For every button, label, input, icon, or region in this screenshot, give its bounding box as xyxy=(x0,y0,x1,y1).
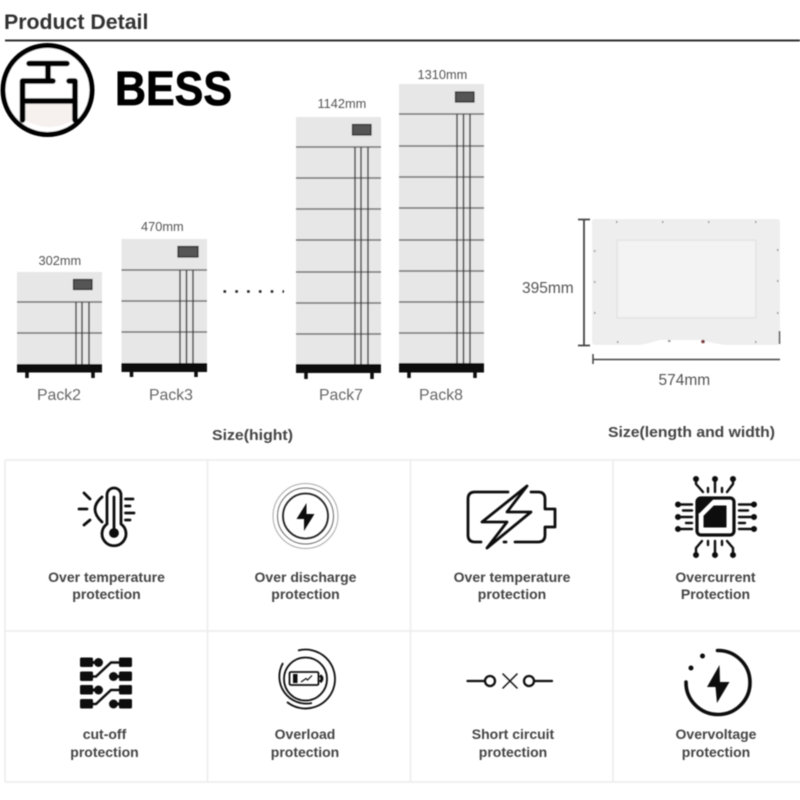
label: Pack3: Pack3 xyxy=(149,387,193,404)
dimension label: 1142mm: 1142mm xyxy=(318,96,366,111)
label: Protection xyxy=(681,586,750,602)
label: Pack7: Pack7 xyxy=(319,387,363,404)
icon: battery with lightning bolt xyxy=(468,486,555,548)
label: protection xyxy=(478,586,546,602)
label: Short circuit xyxy=(472,726,555,742)
label: Over temperature xyxy=(454,569,571,585)
label: Over temperature xyxy=(48,569,165,585)
feature: over temperature protection (battery) xyxy=(454,486,571,602)
product: Pack2 stack xyxy=(17,272,102,378)
product: Pack7 stack xyxy=(296,117,381,379)
label: protection xyxy=(70,744,139,760)
feature: short circuit protection xyxy=(468,674,555,760)
height dimension arrow xyxy=(578,220,590,346)
label: Overload xyxy=(275,726,335,742)
dimension label: 1310mm: 1310mm xyxy=(418,67,467,82)
label: Pack8: Pack8 xyxy=(419,387,463,404)
label: Overvoltage xyxy=(676,726,757,742)
product: Pack3 stack xyxy=(122,239,207,377)
dimension label: 395mm: 395mm xyxy=(522,280,574,297)
label: protection xyxy=(479,744,547,760)
top view of battery module xyxy=(592,219,780,345)
icon: switch circuit rows xyxy=(80,658,132,708)
feature: over discharge protection xyxy=(255,484,357,602)
icon: microchip xyxy=(676,477,756,557)
logo: BESS emblem xyxy=(3,46,92,134)
icon: bolt in rings xyxy=(273,484,338,548)
label: protection xyxy=(271,586,340,602)
feature: over temperature protection xyxy=(48,488,165,602)
icon: bolt in open ring xyxy=(686,650,750,714)
feature: overload protection xyxy=(271,650,339,760)
feature: overcurrent protection xyxy=(675,477,756,602)
protection feature grid xyxy=(5,460,800,782)
label: protection xyxy=(271,744,339,760)
label: Overcurrent xyxy=(675,569,756,585)
logo wordmark: BESS: BESS xyxy=(115,63,232,116)
width dimension arrow xyxy=(593,354,780,364)
icon: open switch with cross xyxy=(468,674,552,688)
caption: Size(length and width): Size(length and width) xyxy=(608,425,775,441)
icon: battery in broken rings xyxy=(279,650,335,709)
icon: thermometer with sun xyxy=(79,488,134,546)
label: cut-off xyxy=(83,726,127,742)
caption: Size(hight): Size(hight) xyxy=(212,428,293,444)
dimension label: 302mm: 302mm xyxy=(38,253,81,268)
product: Pack8 stack xyxy=(399,84,484,378)
dimension label: 574mm: 574mm xyxy=(658,372,710,389)
label: Over discharge xyxy=(255,569,357,585)
dimension label: 470mm: 470mm xyxy=(141,219,184,234)
label: protection xyxy=(72,586,141,602)
label: Pack2: Pack2 xyxy=(37,387,81,404)
feature: cut-off protection xyxy=(70,658,139,760)
label: protection xyxy=(682,744,750,760)
heading: Product Detail: Product Detail xyxy=(4,10,148,34)
feature: overvoltage protection xyxy=(676,650,757,760)
ellipsis between packs xyxy=(224,290,284,293)
